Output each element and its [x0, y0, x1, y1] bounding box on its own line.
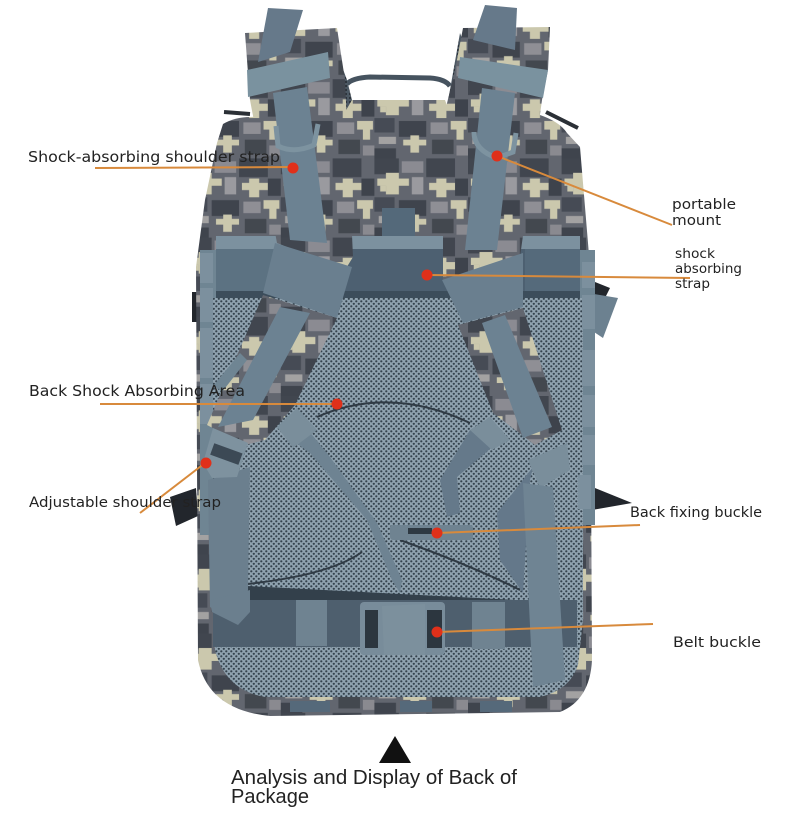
- callout: shock absorbing strap: strap: [675, 277, 710, 292]
- lower straps over belt: [523, 483, 565, 687]
- caption title: [231, 767, 517, 808]
- bottom molle tabs: [290, 701, 512, 712]
- left shoulder strap: [207, 8, 352, 445]
- callout: back fixing buckle: Back fixing buckle: [630, 505, 762, 521]
- callout: shock-absorbing shoulder strap: [28, 148, 298, 174]
- callout: shock absorbing strap: shock: [675, 247, 715, 262]
- callout: back shock absorbing area: [29, 382, 342, 410]
- waist belt: [213, 600, 577, 649]
- callout: portable mount: mount: [672, 213, 722, 229]
- callout: belt buckle: [432, 624, 761, 651]
- right shoulder strap: [442, 5, 562, 445]
- belt buckle: [360, 602, 445, 655]
- mesh back panel: [213, 298, 583, 697]
- callout: adjustable shoulder strap: Adjustable shoulder strap: [29, 495, 221, 511]
- callout: adjustable shoulder strap: [29, 458, 221, 513]
- horizontal padded band: [216, 236, 580, 298]
- callout: portable mount: portable: [672, 197, 736, 213]
- callout: belt buckle: Belt buckle: [673, 635, 761, 651]
- callout: back shock absorbing area: Back Shock Absorbing Area: [29, 382, 245, 400]
- backpack illustration: [170, 5, 632, 716]
- left adjuster buckle and lower strap: [203, 408, 402, 625]
- icon: black triangle pointer: [379, 736, 411, 763]
- left and right molle side tabs: [200, 253, 595, 509]
- caption title: Analysis and Display of Back of: [231, 767, 517, 789]
- chest clip: [390, 525, 473, 540]
- callout: shock absorbing strap: absorbing: [675, 262, 742, 277]
- shoulder pad mesh edges: [328, 33, 470, 124]
- right adjuster buckle and lower strap: [440, 417, 570, 593]
- zipper pull left and right: [224, 112, 578, 128]
- black side tabs: [170, 280, 632, 526]
- callout: shock absorbing strap: [422, 247, 742, 292]
- callout: portable mount: [492, 150, 736, 229]
- left shoulder pad: [245, 28, 353, 270]
- grab tab: [382, 208, 415, 237]
- right side webbing flap: [594, 294, 618, 338]
- right shoulder pad: [443, 27, 550, 280]
- callout: shock-absorbing shoulder strap: Shock-absorbing shoulder strap: [28, 148, 280, 166]
- left and right side columns: [200, 250, 595, 535]
- callout: back fixing buckle: [432, 505, 762, 538]
- mesh curved contour: [247, 402, 520, 590]
- camouflage body: [196, 100, 592, 716]
- top carry handle: [347, 77, 450, 86]
- caption title: Package: [231, 786, 309, 808]
